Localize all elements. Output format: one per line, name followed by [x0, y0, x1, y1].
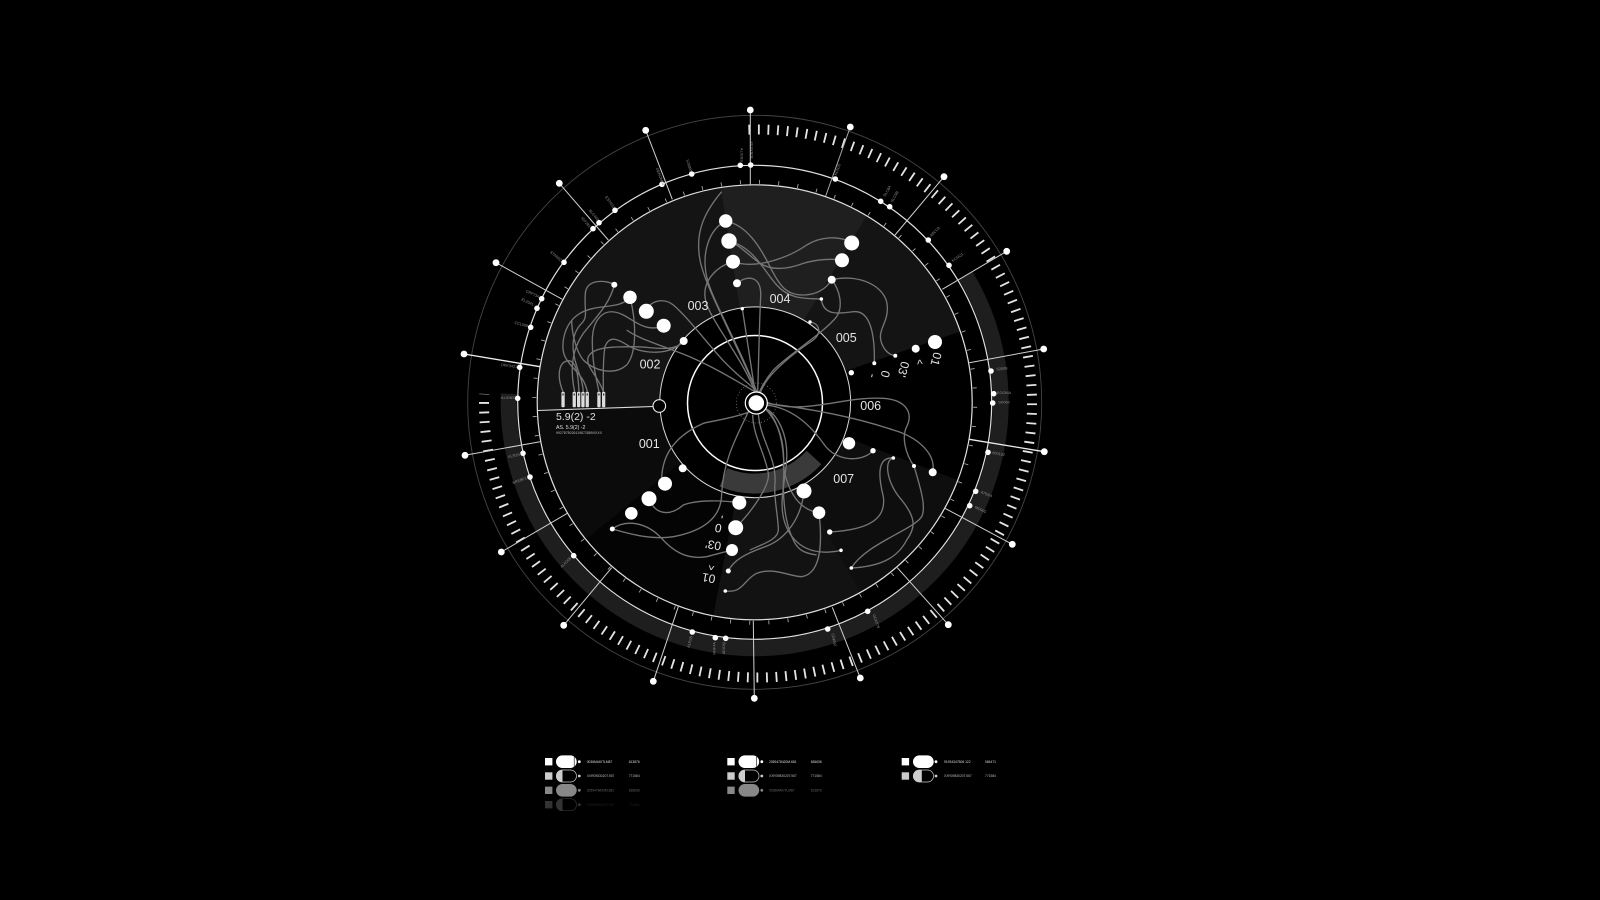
legend row 3: 0036MAKITLM87 — [769, 788, 795, 792]
legend row 1: 084471 — [985, 760, 996, 764]
legend row 3: 2059478420M.681 — [587, 788, 614, 792]
legend column 1 — [545, 755, 640, 811]
faint outer ring — [468, 115, 1042, 689]
ring dots — [515, 162, 996, 641]
vial markers — [561, 392, 605, 407]
rotated scale text lower: ^ — [707, 558, 716, 573]
legend column 3 — [902, 755, 996, 782]
legend row 2 — [902, 770, 996, 782]
outer tick ring — [484, 130, 1032, 678]
ring labels: CDKN2 — [830, 633, 837, 647]
legend row 1: 0036MAKITLM87 — [587, 760, 613, 764]
legend row 2 — [545, 770, 640, 782]
legend column 2 — [727, 755, 822, 797]
central hub — [736, 383, 776, 423]
legend row 2: 771584 — [985, 774, 996, 778]
ring labels: GENOM04 — [655, 167, 665, 186]
ring labels: ABCC8 — [929, 226, 941, 238]
ring labels: EL2041 — [521, 298, 534, 307]
legend row 2 — [727, 770, 822, 782]
rotated scale text right: - — [865, 372, 880, 380]
formula text block — [556, 411, 603, 435]
rotated scale text right: ^ — [917, 357, 924, 371]
rotated scale text lower — [701, 507, 725, 586]
white ring — [518, 165, 992, 639]
legend row 4: XXR0983020T.557 — [587, 803, 615, 807]
rotated scale text lower: 0 — [713, 520, 723, 535]
legend row 3: 636636 — [629, 788, 640, 792]
rotated scale text lower: 03' — [704, 537, 722, 553]
data dots: lower right cluster — [796, 484, 853, 570]
ring labels: BLC402 — [588, 209, 600, 222]
sector numbers: 005 — [836, 331, 857, 345]
middle ring — [660, 307, 851, 498]
data dots: cluster 001 — [610, 464, 687, 532]
ring labels: STAR62 — [549, 250, 562, 262]
ring labels: EOOMA — [997, 391, 1012, 395]
legend row 4 — [545, 799, 640, 811]
legend row 1: 91934347506 122 — [944, 760, 971, 764]
legend row 1: 636636 — [811, 760, 822, 764]
ring labels: SREBF1 — [512, 476, 527, 485]
sector numbers: 006 — [860, 399, 881, 413]
rotated scale text lower: ' — [720, 507, 725, 521]
ring labels: ADIOQ — [722, 642, 726, 654]
sector numbers — [639, 292, 881, 486]
rotated scale text right: 0 — [878, 369, 893, 379]
ring labels: ALR204 — [508, 452, 522, 459]
ring labels: SK060 — [998, 400, 1010, 404]
legend row 3 — [727, 784, 822, 797]
ring labels: KCNQ1 — [951, 252, 964, 263]
outer spokes — [464, 110, 1044, 698]
ring labels: GCK079 — [872, 614, 880, 629]
inner ring — [688, 336, 822, 470]
legend row 1 — [727, 755, 822, 768]
data dots: cluster 007 — [843, 437, 937, 476]
legend row 1 — [902, 755, 996, 768]
sector numbers: 003 — [688, 299, 708, 313]
sector numbers: 002 — [640, 358, 660, 372]
ring labels: HNF4A — [713, 642, 717, 655]
ring labels: IGF281 — [580, 216, 591, 228]
ring labels: 600192 — [992, 451, 1005, 457]
legend row 4: 771584 — [629, 803, 640, 807]
legend row 1 — [545, 755, 640, 768]
formula text block: AS. 5.9(2) -2 — [556, 425, 586, 431]
rotated scale text right: 03' — [895, 360, 912, 379]
legend row 3 — [545, 784, 640, 797]
ring labels: CRP734 — [525, 289, 540, 299]
ring labels: KEXVR08 — [750, 141, 754, 159]
small ticks around disc — [534, 182, 975, 623]
legend row 2: XXR0983020T.557 — [944, 774, 972, 778]
ring labels: SJ6891 — [685, 159, 693, 172]
data dots: cluster 006 — [849, 335, 942, 375]
legend row 2: 771584 — [629, 774, 640, 778]
ring labels: ATI564 — [980, 490, 993, 498]
ring labels: ESTR32 — [604, 195, 616, 209]
ring labels: S2009 — [996, 367, 1008, 371]
data dots: lower cluster — [724, 496, 746, 593]
rotated scale text right: 01 — [927, 351, 944, 368]
legend row 2: XXR0983020T.557 — [769, 774, 797, 778]
legend row 1: 613876 — [629, 760, 640, 764]
rotated scale text right — [865, 351, 944, 380]
ring labels: SLC9B — [890, 190, 900, 203]
ring labels: KCNJ5 — [834, 163, 842, 176]
formula text block: 9927878026119872889XXXX — [556, 431, 603, 435]
data dots: cluster 004 — [719, 214, 744, 310]
sector numbers: 001 — [639, 437, 660, 451]
ring labels: DKK3421 — [501, 363, 517, 369]
data dots: cluster 003 — [611, 282, 688, 345]
legend row 2: 771584 — [811, 774, 822, 778]
ring labels: SLC6A — [883, 185, 892, 197]
legend row 3: 613876 — [811, 788, 822, 792]
disc edge ring — [537, 185, 972, 620]
panel: main disc with sectors — [537, 185, 972, 620]
inner grey arc — [723, 458, 814, 484]
legend row 1: 2059478420M.681 — [769, 760, 797, 764]
sector numbers: 007 — [833, 472, 854, 486]
sector numbers: 004 — [770, 292, 790, 306]
legend row 2: XXR0983020T.557 — [587, 774, 615, 778]
pointer line with open circle — [537, 400, 666, 412]
ring labels — [501, 141, 1012, 655]
data dots: cluster 005 — [808, 236, 859, 324]
ring labels: ALIGNS — [739, 148, 743, 162]
ring labels: MD905 — [974, 505, 987, 514]
ring labels: ALR2B — [687, 635, 694, 648]
ring labels: ALR208 — [560, 556, 572, 569]
ring labels: ALIGNS — [501, 396, 515, 400]
rotated scale text lower: 01 — [701, 570, 716, 586]
grey band on outer ring — [509, 276, 1001, 648]
formula text block: 5.9(2) -2 — [556, 411, 596, 423]
curved connectors — [559, 192, 933, 591]
spoke end dots — [461, 107, 1048, 702]
ring labels: CCL508 — [514, 321, 529, 328]
